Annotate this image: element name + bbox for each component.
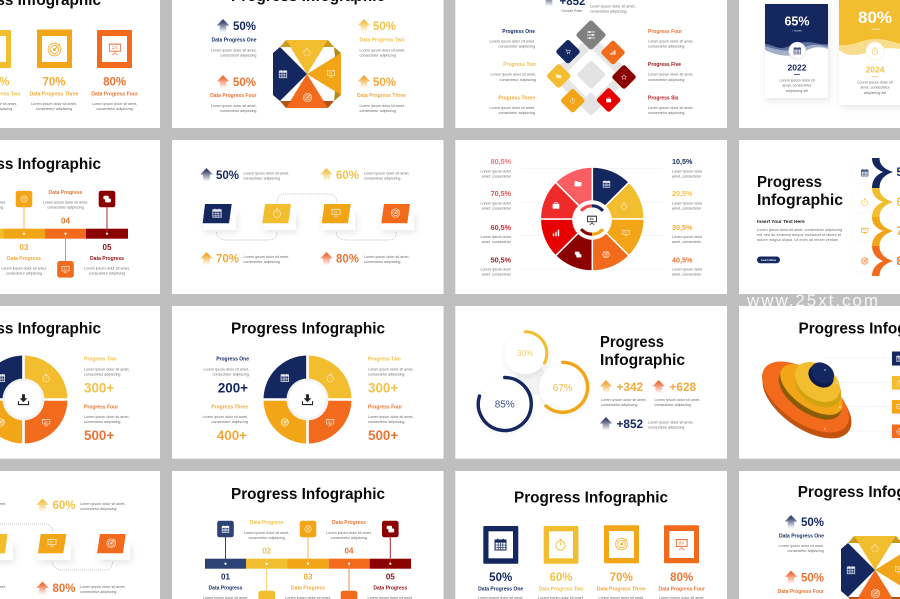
stat +342: +342 [616, 380, 644, 394]
left values: 70,5% [491, 189, 512, 198]
right values: Lorem ipsum dolor [672, 268, 703, 272]
stat +852: +852 [616, 417, 644, 431]
item: Progress Two: consectetur adipiscing [368, 372, 404, 376]
item: Progress Three: Progress Three [211, 405, 248, 411]
item: Data Progress One [211, 19, 257, 57]
stat 70%: 70% [216, 254, 239, 266]
card: 2024: / month [870, 27, 880, 31]
item: Progress Three: consectetur adipiscing [212, 420, 248, 424]
dotted connectors [0, 524, 112, 570]
stat 80% [320, 252, 410, 266]
heading: Infographic [600, 352, 685, 369]
snake connector [872, 158, 893, 276]
panel: timeline center [172, 471, 444, 599]
stat 50%: 50% [216, 170, 239, 182]
card: 2024: 80% [858, 8, 892, 27]
stat 80% [36, 582, 126, 596]
item: Progress Four: consectetur adipiscing [84, 420, 120, 424]
item: Progress Four: Progress Four [368, 405, 402, 411]
card: 80% orange: 80% [670, 572, 693, 584]
stat 60%: consectetur adipiscing [364, 176, 400, 180]
icon: board node [341, 591, 357, 599]
right values: Lorem ipsum dolor [672, 235, 703, 239]
step: calendar [203, 204, 236, 230]
left values: amet, consectetur [482, 206, 512, 210]
item 03: 03 [20, 243, 29, 252]
heading: Progress [600, 334, 664, 351]
card: 60% yellow: 60% [549, 572, 573, 584]
left values: Lorem ipsum dolor [480, 201, 512, 205]
ring 30% [504, 332, 547, 374]
item: Progress Two [368, 357, 414, 396]
ring 85% [478, 377, 531, 430]
item: Progress One [490, 29, 535, 48]
item 04: Data Progress [332, 520, 366, 526]
panel: icon squares top-left [0, 0, 160, 128]
watermark: www.25xt.com [746, 291, 878, 310]
card: 2022: Lorem ipsum dolor sit [779, 78, 815, 82]
ring 67%: 67% [553, 383, 573, 394]
stat 80%: 80% [336, 254, 359, 266]
item 04: consectetur adipiscing [47, 206, 84, 210]
item: Data Progress Three [357, 75, 406, 113]
item: Progress Two: Progress Two [503, 62, 536, 68]
growth stat +852: Growth Rate [561, 9, 582, 13]
item 04: Lorem ipsum dolor sit amet, [43, 200, 88, 204]
item: Progress Four: consectetur adipiscing [368, 420, 404, 424]
item: Progress One: Progress One [502, 29, 535, 35]
item 02: Data Progress [250, 520, 284, 526]
card: 2024 [839, 0, 900, 105]
item: Data Progress Four: consectetur adipiscing [220, 109, 256, 113]
stacked 3D chart [750, 347, 864, 453]
stat 80%: consectetur adipiscing [364, 260, 400, 264]
diamond diagram [546, 19, 637, 116]
right values: amet, consectetur [672, 174, 702, 178]
item: Progress Two: 300+ [368, 380, 398, 396]
left values: 80,5% [491, 157, 512, 166]
item: Progress One: consectetur adipiscing [212, 372, 249, 376]
item 05 [368, 572, 413, 599]
icon: board node [57, 261, 74, 278]
stat +342: Lorem ipsum dolor sit amet, [601, 398, 646, 402]
panel: four icon squares [455, 471, 727, 599]
stat 50%: consectetur adipiscing [244, 176, 280, 180]
item: Data Progress One: Lorem ipsum dolor sit amet, [778, 544, 824, 548]
body text: Lorem ipsum dolor sit amet, consectetur adipiscing [757, 228, 842, 232]
item: Data Progress Four: 50% [233, 77, 256, 89]
stat 70%: consectetur adipiscing [244, 260, 280, 264]
growth stat +852: Lorem ipsum dolor sit amet, [590, 4, 636, 8]
stat 60%: Lorem ipsum dolor sit amet, [364, 171, 410, 175]
clipped text [0, 502, 6, 589]
stat 80%: 80% [52, 583, 76, 595]
title: Progress Infographic [514, 490, 668, 506]
step: stopwatch [0, 534, 13, 560]
item: Progress One [204, 357, 249, 396]
item: Progress Two: Lorem ipsum dolor sit amet, [490, 73, 536, 77]
item: Data Progress Four: Data Progress Four [210, 93, 257, 99]
item 04: Data Progress [49, 190, 83, 196]
card: 70% amber square: 70% [42, 76, 66, 88]
item: Progress Six [648, 96, 694, 115]
body text: elit, sed do eiusmod tempor incididunt ut labore et [757, 233, 841, 237]
item 04: Lorem ipsum dolor sit amet, [326, 531, 372, 535]
guide lines [521, 168, 663, 269]
item: Data Progress One: Data Progress One [779, 534, 824, 540]
item: Progress Three: consectetur adipiscing [498, 111, 535, 115]
item 05: Data Progress [90, 256, 124, 262]
donut chart [0, 356, 67, 443]
item 03 [1, 243, 47, 276]
card: 80% orange square: consectetur adipiscing [96, 107, 133, 111]
card: 50% navy [478, 526, 523, 599]
stat 60% [36, 498, 126, 512]
item 02 [244, 520, 289, 556]
card: 80% orange [658, 525, 705, 599]
item 01: Data Progress [209, 586, 243, 592]
left values: 50,5% [491, 256, 512, 265]
stat +628: consectetur adipiscing [654, 403, 691, 407]
panel: donut center [172, 306, 444, 459]
body text [757, 219, 842, 242]
stat +628 [652, 380, 700, 407]
step: target [97, 534, 130, 560]
card: 70% amber: Data Progress Three [597, 587, 646, 593]
stat 80%: Lorem ipsum dolor sit amet, [80, 585, 126, 589]
octagon chart [273, 40, 341, 108]
card: 2024: amet, consectetur [860, 86, 890, 90]
item 04: consectetur adipiscing [331, 536, 367, 540]
stat 70%: Lorem ipsum dolor sit amet, [244, 255, 289, 259]
step: board [38, 534, 71, 560]
item: Progress One: Progress One [216, 357, 249, 363]
item: Data Progress Four: 50% [801, 572, 824, 584]
card: 2022: 65% [784, 14, 810, 28]
item: Data Progress One: consectetur adipiscing [788, 549, 824, 553]
clipped text [0, 200, 6, 210]
item 04 [326, 520, 372, 556]
left values: Lorem ipsum dolor [480, 169, 512, 173]
item: Progress Four: consectetur adipiscing [648, 44, 684, 48]
card: partial yellow square [0, 30, 20, 111]
item 05: 05 [103, 243, 112, 252]
item 03: Data Progress [7, 256, 41, 262]
icon: target node [300, 521, 316, 537]
panel: parallelogram flow [172, 140, 444, 294]
item: Data Progress Two: Data Progress Two [360, 38, 404, 44]
item 01 [203, 572, 248, 599]
timeline bar [205, 537, 411, 591]
item: Progress Five: consectetur adipiscing [648, 78, 684, 82]
item: Progress Six: Lorem ipsum dolor sit amet, [648, 106, 694, 110]
button [757, 256, 780, 263]
stat 60%: 60% [52, 500, 76, 512]
item: Data Progress Two: consectetur adipiscing [360, 53, 396, 57]
dotted connectors [216, 194, 396, 240]
item: Progress Five: Lorem ipsum dolor sit amet, [648, 73, 694, 77]
stat +342: consectetur adipiscing [601, 403, 638, 407]
card: 70% amber square: Lorem ipsum dolor sit amet, [31, 102, 77, 106]
step: board [322, 204, 355, 230]
heading [600, 334, 685, 369]
pie chart [540, 167, 644, 271]
item 03: consectetur adipiscing [6, 272, 42, 276]
stat +342 [600, 380, 646, 407]
item: Progress Three: Progress Three [498, 96, 535, 102]
panel: year cards [739, 0, 900, 128]
item: Data Progress Four [778, 570, 824, 595]
item 03 [285, 572, 331, 599]
left values: Lorem ipsum dolor [480, 268, 512, 272]
right values: amet, consectetur [672, 240, 702, 244]
panel: eight segment pie [455, 140, 727, 294]
right values: 10,5% [672, 157, 693, 166]
card: 70% amber square [30, 30, 79, 111]
item: Progress Two: consectetur adipiscing [84, 372, 120, 376]
card: 70% amber: 70% [610, 572, 633, 584]
stat 80%: Lorem ipsum dolor sit amet, [364, 255, 410, 259]
left values: 60,5% [491, 223, 512, 232]
card: 80% orange square [91, 30, 138, 111]
item: Data Progress One: Data Progress One [211, 38, 257, 44]
card: 50% navy: 50% [489, 572, 512, 584]
item: Progress Five: Progress Five [648, 62, 681, 68]
ring 67% [539, 362, 588, 412]
item: Progress Six: consectetur adipiscing [648, 111, 684, 115]
card: 50% navy: Data Progress One [478, 587, 523, 593]
item: Progress Four: Progress Four [648, 29, 682, 35]
item: Progress Four [648, 29, 694, 48]
item: Data Progress One: Lorem ipsum dolor sit amet, [211, 48, 256, 52]
item: Progress Four: 500+ [368, 428, 398, 443]
icon: target node [16, 191, 32, 207]
card: 2022: adipiscing elit [786, 89, 808, 93]
card: 80% orange: Data Progress Four [658, 587, 705, 593]
item 05: Lorem ipsum dolor sit amet, [84, 266, 130, 270]
left values: Lorem ipsum dolor [480, 235, 512, 239]
heading: Progress [757, 174, 822, 191]
heading [757, 174, 843, 209]
card: 60% yellow [538, 526, 584, 599]
item: Progress Two: Progress Two [84, 357, 117, 363]
panel: octagon pinwheel [172, 0, 444, 128]
item 05: Data Progress [373, 586, 407, 592]
item 02: Lorem ipsum dolor sit amet, [244, 531, 289, 535]
item 05: 05 [386, 572, 395, 582]
title: Progress Infographic [231, 320, 385, 338]
icon: coins node [99, 191, 115, 207]
item 04: 04 [61, 216, 70, 226]
right values: 20,5% [672, 189, 693, 198]
donut chart [264, 356, 351, 443]
item: Data Progress Three: Data Progress Three [357, 93, 406, 99]
item: Progress Four: Progress Four [84, 405, 118, 411]
button: Learn More [761, 258, 777, 262]
card: 80% orange square: 80% [103, 76, 126, 88]
panel: timeline left [0, 140, 160, 294]
pie hub [572, 200, 612, 240]
stat +628: +628 [670, 380, 697, 394]
item 03: 03 [304, 572, 313, 582]
item: Progress Two: Lorem ipsum dolor sit amet, [84, 367, 130, 371]
item 04: 04 [345, 546, 354, 556]
item 01: 01 [221, 572, 230, 582]
item: Progress One: consectetur adipiscing [498, 44, 535, 48]
stat 80%: consectetur adipiscing [80, 590, 116, 594]
card: 2024: adipiscing elit [864, 91, 886, 95]
stat +852: consectetur adipiscing [648, 425, 684, 429]
card: 70% amber [597, 525, 646, 599]
right values: amet, consectetur [672, 273, 702, 277]
item 03: Lorem ipsum dolor sit amet, [1, 266, 47, 270]
timeline bar [0, 207, 128, 262]
panel: diamond cluster [455, 0, 727, 128]
step: stopwatch [262, 204, 296, 230]
item: Progress Two: Progress Two [368, 357, 401, 363]
panel: stacked cone [739, 306, 900, 459]
item: Progress Six: Progress Six [648, 96, 679, 102]
stat 60%: consectetur adipiscing [80, 507, 116, 511]
stat +628: Lorem ipsum dolor sit amet, [654, 398, 700, 402]
item: Data Progress Three: 50% [373, 77, 396, 89]
item: Data Progress One: 50% [233, 21, 256, 33]
right values: Lorem ipsum dolor [672, 201, 703, 205]
item: Progress Two [84, 357, 130, 396]
card: 70% amber square: Data Progress Three [30, 92, 79, 98]
card: 80% orange square: Data Progress Four [91, 92, 138, 98]
stat 60%: Lorem ipsum dolor sit amet, [80, 502, 126, 506]
right values [672, 157, 703, 277]
card: 2022: / month [792, 28, 802, 32]
item: Progress Three [490, 96, 535, 115]
item: Progress Four [368, 405, 414, 443]
stat 60% [320, 168, 410, 182]
legend icons [892, 352, 900, 438]
growth stat +852: consectetur adipiscing [590, 9, 626, 13]
item: Progress Three: Lorem ipsum dolor sit amet, [490, 106, 535, 110]
right values: Lorem ipsum dolor [672, 169, 703, 173]
item: Progress Three: Lorem ipsum dolor sit amet, [202, 415, 248, 419]
stat +852 [600, 417, 694, 431]
item: Data Progress One: 50% [801, 517, 824, 529]
growth stat +852 [543, 0, 636, 13]
step: target [381, 204, 414, 230]
item: Progress Four: 500+ [84, 428, 114, 443]
card: 60% yellow: Data Progress Two [539, 587, 583, 593]
icon tiles [853, 162, 873, 270]
item: Progress Four [84, 405, 130, 443]
icon: stopwatch node [258, 591, 275, 599]
left values [480, 157, 512, 277]
card: 70% amber square: consectetur adipiscing [36, 107, 72, 111]
item: Data Progress One: consectetur adipiscing [220, 53, 256, 57]
stat 60%: 60% [336, 170, 359, 182]
item: Progress One: Lorem ipsum dolor sit amet, [204, 367, 249, 371]
left values: amet, consectetur [482, 240, 512, 244]
item: Progress Two: consectetur adipiscing [500, 78, 536, 82]
octagon chart [841, 536, 900, 599]
item: Data Progress Two: Lorem ipsum dolor sit amet, [360, 48, 405, 52]
title: Progress Infographic [231, 486, 385, 503]
item 02: consectetur adipiscing [248, 536, 285, 540]
item: Progress Four: Lorem ipsum dolor sit amet, [648, 39, 694, 43]
item 04 [43, 190, 88, 226]
right values: 30,5% [672, 223, 693, 232]
icon: calendar node [217, 521, 234, 537]
right values: amet, consectetur [672, 206, 702, 210]
heading: Infographic [757, 192, 843, 209]
card: 80% orange square: Lorem ipsum dolor sit amet, [92, 102, 137, 106]
item: Progress Two: 300+ [84, 380, 114, 396]
body text: dolore magna aliqua. Ut enim ad minim veniam [757, 238, 838, 242]
card: 2024: 2024 [866, 64, 885, 74]
panel: snake infographic [739, 140, 900, 294]
card: 2024: Lorem ipsum dolor sit [857, 80, 893, 84]
card: 2022: 2022 [788, 62, 807, 72]
item: Progress One: 200+ [218, 380, 248, 396]
item: Data Progress Three: consectetur adipiscing [360, 109, 396, 113]
left values: amet, consectetur [482, 174, 512, 178]
ring 30%: 30% [517, 349, 533, 358]
item: Data Progress One [778, 515, 824, 553]
body text: Insert Your Text Here [757, 219, 805, 225]
item: Progress Two: Lorem ipsum dolor sit amet, [368, 367, 414, 371]
leader lines [825, 358, 892, 431]
item: Progress Three: 400+ [217, 428, 247, 443]
pie icons [553, 180, 630, 258]
card: 2022: amet, consectetur [782, 84, 812, 88]
item: Data Progress Three: Lorem ipsum dolor sit amet, [360, 104, 405, 108]
card: 2022 [765, 4, 828, 98]
item 03: Data Progress [291, 586, 325, 592]
icon: coins node [382, 521, 399, 537]
item: Progress Five [648, 62, 694, 82]
panel: progress rings [455, 306, 727, 459]
right values: 40,5% [672, 256, 693, 265]
panel: donut left [0, 306, 160, 459]
item: Data Progress Four: Lorem ipsum dolor sit amet, [211, 104, 256, 108]
item: Progress Four: Lorem ipsum dolor sit amet, [368, 415, 414, 419]
item: Progress One: Lorem ipsum dolor sit amet, [490, 39, 535, 43]
item 05: consectetur adipiscing [89, 272, 125, 276]
item: Data Progress Four: Data Progress Four [778, 589, 824, 595]
stat 70% [200, 252, 289, 266]
item: Progress Two [490, 62, 536, 82]
clipped numbers [896, 167, 900, 268]
stat 50%: Lorem ipsum dolor sit amet, [244, 171, 289, 175]
panel: octagon right [739, 471, 900, 599]
stat 50% [200, 168, 289, 182]
stat +852: Lorem ipsum dolor sit amet, [648, 420, 694, 424]
ring 85%: 85% [495, 400, 515, 410]
panel: parallelogram flow left [0, 471, 160, 599]
item 02: 02 [262, 546, 272, 556]
item: Progress Four: Lorem ipsum dolor sit amet, [84, 415, 130, 419]
ring connector shade [505, 354, 562, 404]
item: Data Progress Two: 50% [373, 21, 396, 33]
item: Data Progress Two [358, 19, 405, 57]
item: Data Progress Four [210, 75, 257, 113]
item: Progress Three [202, 405, 248, 443]
item 05 [84, 243, 130, 276]
left values: amet, consectetur [482, 273, 512, 277]
